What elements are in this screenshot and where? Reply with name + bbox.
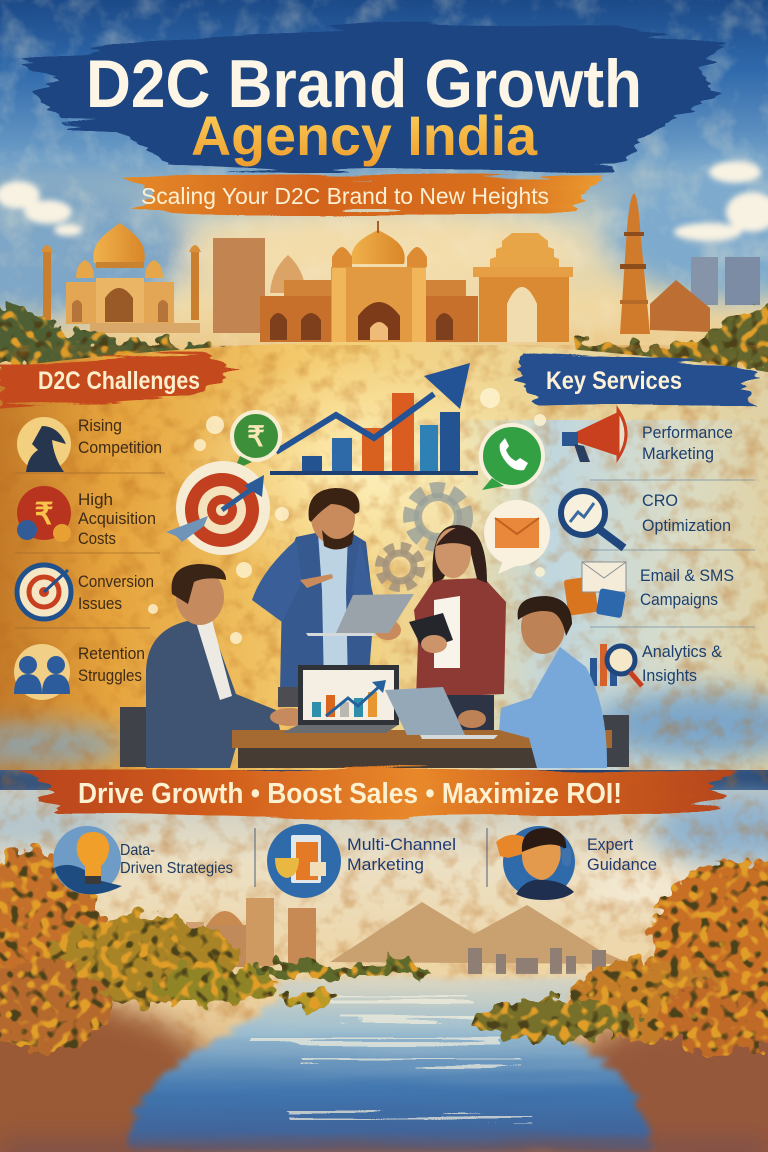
under table shadow xyxy=(238,748,606,768)
item: Analytics & Insights: Analytics & xyxy=(642,642,723,661)
item: Rising Competition: Competition xyxy=(78,438,162,457)
right foliage xyxy=(470,860,768,1055)
heading: main title: D2C Brand Growth xyxy=(86,46,642,122)
feature: Data-Driven Strategies: Data- xyxy=(120,842,155,859)
item: Performance Marketing: Marketing xyxy=(642,444,714,463)
dividers xyxy=(590,480,755,627)
skyline: distant towers xyxy=(213,238,760,333)
left foliage xyxy=(0,850,340,1050)
ground edge xyxy=(0,342,768,420)
skyline: red fort xyxy=(260,221,478,342)
banner: Drive Growth, Boost Sales, Maximize ROI xyxy=(22,767,738,818)
bokeh dots xyxy=(148,388,546,644)
item: Conversion Issues xyxy=(17,565,154,619)
icon: rupee speech bubble: ₹ xyxy=(247,421,265,452)
icon: email bubble xyxy=(484,500,550,574)
icon: target with arrow xyxy=(166,461,270,555)
icon: gears xyxy=(381,490,465,586)
background: sky xyxy=(0,0,768,380)
lower sky tints xyxy=(0,794,768,906)
feature: Multi-Channel Marketing: Multi-Channel xyxy=(347,835,456,854)
item: Conversion Issues: Issues xyxy=(78,594,122,613)
item: High Acquisition Costs: Costs xyxy=(78,529,116,548)
person: woman xyxy=(409,525,506,737)
item: CRO Optimization: Optimization xyxy=(642,516,731,535)
person: standing man xyxy=(252,488,414,707)
background: central warm panel xyxy=(0,418,768,770)
panel: D2C Challenges xyxy=(0,354,240,700)
person: right seated man xyxy=(458,596,607,768)
banner: Drive Growth, Boost Sales, Maximize ROI: Drive Growth • Boost Sales • Maximize ROI! xyxy=(78,778,622,810)
icon: WhatsApp bubble xyxy=(481,425,543,490)
bar chart with growth arrow xyxy=(270,363,478,475)
lower side tints xyxy=(0,689,768,765)
item: Analytics & Insights xyxy=(590,642,723,686)
item: Retention Struggles: Retention xyxy=(78,644,145,663)
skyline: India Gate xyxy=(473,233,573,342)
central glow xyxy=(180,350,560,590)
dividers xyxy=(15,473,165,628)
feature: Data-Driven Strategies: Driven Strategies xyxy=(120,860,233,877)
subtitle: Scaling Your D2C Brand to New Heights xyxy=(141,183,549,209)
tree line xyxy=(0,300,768,372)
item: Analytics & Insights: Insights xyxy=(642,666,697,685)
laptop: front with chart xyxy=(282,665,399,733)
feature: Data-Driven Strategies xyxy=(53,826,233,894)
item: High Acquisition Costs: High xyxy=(78,490,113,509)
item: Rising Competition xyxy=(17,416,162,472)
laptop: right xyxy=(385,687,498,739)
item: Performance Marketing xyxy=(562,410,733,463)
people group xyxy=(120,488,629,768)
lower tree line xyxy=(245,960,435,978)
item: Retention Struggles: Struggles xyxy=(78,666,142,685)
banner: Key Services xyxy=(518,354,758,406)
table xyxy=(232,730,612,748)
item: Email & SMS Campaigns: Email & SMS xyxy=(640,566,734,585)
item: Conversion Issues: Conversion xyxy=(78,572,154,591)
laptop: held xyxy=(336,594,414,633)
chairs xyxy=(120,707,629,767)
feature: Expert Guidance xyxy=(496,826,657,900)
sky side tints xyxy=(0,160,768,320)
title banner xyxy=(20,26,727,216)
river highlights xyxy=(250,995,530,1118)
dividers: features xyxy=(255,828,487,887)
sky mottling xyxy=(0,0,768,345)
banner: D2C Challenges: D2C Challenges xyxy=(38,367,200,395)
item: CRO Optimization xyxy=(561,491,731,548)
bottom corners xyxy=(0,1000,768,1152)
skyline: Qutub Minar xyxy=(620,193,710,334)
feature: Expert Guidance: Guidance xyxy=(587,855,657,874)
panel: Key Services xyxy=(518,354,758,686)
clouds xyxy=(0,161,768,241)
banner: D2C Challenges xyxy=(0,354,240,408)
item: High Acquisition Costs: ₹ xyxy=(34,498,54,531)
item: Email & SMS Campaigns: Campaigns xyxy=(640,590,718,609)
heading: second title line: Agency India xyxy=(191,104,538,167)
item: Retention Struggles xyxy=(14,644,145,700)
background: lower landscape xyxy=(0,790,768,1152)
painterly mottling xyxy=(0,345,768,1152)
item: High Acquisition Costs: Acquisition xyxy=(78,509,156,528)
person: left seated man xyxy=(146,564,310,768)
item: Email & SMS Campaigns xyxy=(564,562,734,618)
item: Rising Competition: Rising xyxy=(78,416,122,435)
river xyxy=(129,978,650,1152)
item: Performance Marketing: Performance xyxy=(642,423,733,442)
item: High Acquisition Costs xyxy=(17,486,156,548)
feature: Multi-Channel Marketing: Marketing xyxy=(347,855,424,874)
lower mountains xyxy=(330,902,631,964)
feature: Multi-Channel Marketing xyxy=(267,824,456,898)
icon: rupee speech bubble xyxy=(232,412,280,470)
banner: Key Services: Key Services xyxy=(546,367,682,395)
skyline: Taj Mahal xyxy=(41,223,201,333)
lower city skyline xyxy=(186,898,606,974)
item: CRO Optimization: CRO xyxy=(642,491,678,510)
feature: Expert Guidance: Expert xyxy=(587,835,633,854)
